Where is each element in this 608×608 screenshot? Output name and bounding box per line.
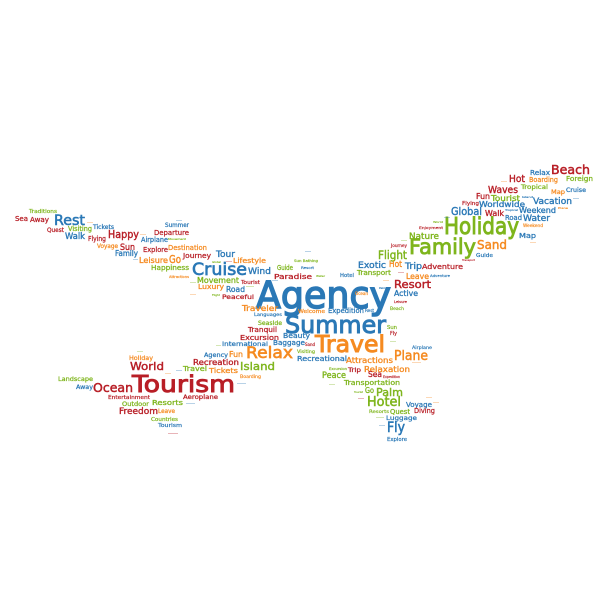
panel: lower right tail wing words — [297, 332, 439, 443]
panel: left wing words: Quest — [47, 228, 65, 234]
panel: fuselage words: Sun Bathing — [294, 259, 318, 263]
panel: left wing words: Airplane — [141, 236, 168, 244]
panel: lower left tail wing words: Leave — [158, 409, 175, 415]
panel: fuselage words: Tranquil — [247, 326, 277, 334]
word: Travel: Travel — [314, 332, 385, 358]
panel: lower left tail wing words: Entertainment — [108, 395, 150, 401]
panel: lower left tail wing words: Recreation — [193, 358, 239, 367]
panel: fuselage words: Movement — [197, 276, 239, 285]
panel: right wing words: Cruise — [566, 187, 586, 194]
panel: left wing words: Voyage — [97, 244, 118, 250]
panel: right wing words: Island — [522, 195, 533, 199]
panel: lower right tail wing words: Expedition — [383, 375, 400, 379]
panel: fuselage words: Paradise — [274, 273, 312, 281]
word: Palm: Palm — [376, 386, 403, 399]
panel: fuselage words: Active — [394, 289, 418, 298]
panel: right wing words: Relax — [530, 169, 550, 177]
panel: right wing words: Guide — [476, 253, 494, 259]
panel: fuselage words: Guide — [277, 264, 293, 272]
panel: fuselage words: Palm — [379, 286, 386, 290]
panel: lower left tail wing words: Travel — [182, 364, 207, 373]
word: Ocean: Ocean — [93, 381, 133, 395]
panel: right wing words: Adventure — [422, 262, 463, 271]
panel: fuselage words: Excursion — [240, 333, 279, 342]
panel: fuselage words: Beauty — [283, 331, 311, 340]
panel: left wing words: Away — [30, 216, 49, 224]
word: Island: Island — [240, 361, 275, 373]
panel: fuselage words: Tourist — [240, 280, 260, 286]
panel: fuselage words: Luxury — [198, 282, 225, 291]
panel: lower left tail wing words: Outdoor — [122, 401, 150, 408]
word: Fly: Fly — [387, 420, 405, 436]
panel: left wing words: Flying — [88, 235, 106, 243]
panel: fuselage words: Water — [316, 274, 326, 278]
panel: left wing words: Walk — [65, 232, 86, 242]
panel: right wing words: Vacation — [533, 197, 572, 207]
panel: fuselage words: Fly — [390, 331, 397, 337]
panel: fuselage words: Resort — [301, 266, 315, 270]
panel: lower right tail wing words: Recreational — [297, 355, 347, 363]
panel: lower left tail wing words: Aeroplane — [183, 394, 218, 401]
panel: right wing words: Road — [505, 214, 522, 222]
panel: right wing words: Leave — [406, 272, 429, 281]
panel: lower right tail wing words: Diving — [414, 407, 435, 415]
panel: lower right tail wing words: Explore — [387, 437, 407, 443]
panel: lower left tail wing words: Holiday — [129, 356, 154, 362]
panel: fuselage words: Welcome — [298, 309, 326, 315]
panel: lower left tail wing words: Tickets — [208, 366, 238, 375]
panel: left wing words: Destination — [168, 244, 207, 252]
panel: lower right tail wing words: Excursion — [329, 367, 347, 371]
panel: right wing words: Exotic — [358, 261, 386, 271]
panel: right wing words: Plane — [558, 206, 568, 210]
panel: right wing words: Adventure — [430, 273, 451, 278]
panel: fuselage words: Road — [226, 285, 245, 294]
panel: fuselage words: Resort — [394, 278, 432, 291]
panel: lower right tail wing words: Relaxation — [364, 365, 410, 374]
panel: lower right tail wing words: Go — [365, 386, 374, 395]
panel: fuselage words: Sand — [305, 342, 315, 347]
panel: right wing words: Transport — [356, 269, 391, 277]
word: Holiday: Holiday — [444, 214, 519, 240]
panel: fuselage words: Tour — [215, 250, 235, 260]
panel: right wing words: Weekend — [519, 206, 556, 215]
panel: right wing words: Foreign — [566, 175, 593, 183]
panel: right wing words: Hot — [509, 174, 525, 185]
panel: right wing words: Waves — [488, 185, 518, 196]
panel: lower right tail wing words: Tourist — [353, 390, 364, 394]
panel: left wing words: Family — [115, 249, 139, 258]
panel: fuselage words: International — [222, 340, 268, 348]
panel: lower right tail wing words: Peace — [322, 371, 346, 381]
panel: left wing words: Explore — [143, 246, 168, 254]
word: Summer: Summer — [285, 311, 386, 339]
panel: fuselage words: Languages — [254, 312, 283, 318]
panel: fuselage words: Lifestyle — [233, 257, 266, 265]
panel: lower right tail wing words: Attractions — [346, 356, 393, 365]
panel: right wing words — [356, 162, 593, 281]
panel: right wing words: Tropical — [504, 208, 518, 212]
panel: left wing words: Sun — [120, 243, 135, 253]
panel: right wing words: Map — [551, 189, 565, 196]
panel: left wing words: Leisure — [139, 255, 168, 265]
word: Family: Family — [409, 235, 476, 259]
panel: right wing words: Water — [523, 213, 551, 223]
panel: fuselage words: Leisure — [394, 300, 407, 304]
panel: lower left tail wing words: Fun — [229, 350, 243, 359]
panel: left wing words: Journey — [182, 252, 211, 260]
panel: fuselage words: Visiting — [297, 349, 316, 354]
word: Hotel: Hotel — [367, 395, 401, 410]
panel: lower left tail wing words: Resorts — [152, 398, 183, 407]
panel: lower left tail wing words: Landscape — [58, 377, 93, 383]
panel: fuselage words: Peaceful — [222, 293, 254, 301]
panel: lower right tail wing words: Airplane — [412, 345, 432, 351]
word: Plane: Plane — [394, 349, 428, 364]
panel: fuselage words: Seaside — [258, 321, 282, 327]
panel: fuselage words: Traveler — [241, 304, 279, 313]
panel: right wing words: Transport — [461, 258, 476, 262]
panel: lower left tail wing words: Freedom — [119, 407, 158, 417]
word: Agency: Agency — [256, 274, 391, 317]
panel: right wing words: Tropical — [520, 184, 548, 191]
panel: fuselage words: Wind — [248, 267, 271, 277]
panel: lower right tail wing words: Resorts — [369, 409, 390, 415]
panel: right wing words: Walk — [485, 209, 504, 218]
panel: right wing words: Enjoyment — [419, 226, 444, 230]
panel: right wing words: Worldwide — [479, 199, 525, 209]
panel: lower left tail wing words: Tourism — [157, 423, 182, 429]
panel: lower right tail wing words: Trip — [347, 366, 361, 374]
panel: left wing words: Tickets — [92, 224, 114, 231]
panel: fuselage words — [190, 250, 432, 354]
word: World: World — [130, 360, 164, 373]
panel: lower left tail wing words: Boarding — [240, 374, 262, 379]
panel: right wing words: Flying — [462, 201, 479, 207]
panel: right wing words: Map — [519, 232, 537, 240]
panel: left wing words: Go — [169, 253, 181, 266]
panel: left wing words: Traditions — [28, 209, 57, 215]
panel: fuselage words: Hotel — [340, 273, 354, 279]
panel: left wing words: Summer — [165, 222, 189, 229]
panel: fuselage words: Rest — [365, 308, 374, 313]
panel: right wing words: Hot — [389, 260, 402, 270]
panel: right wing words: Trip — [404, 262, 422, 272]
panel: lower right tail wing words: Luggage — [386, 414, 417, 422]
panel: right wing words: Global — [451, 206, 482, 218]
panel: lower left tail wing words: Countries — [151, 417, 178, 423]
word: Cruise: Cruise — [192, 260, 247, 279]
word: Beach: Beach — [551, 162, 590, 177]
panel: fuselage words: Expedition — [328, 307, 364, 315]
word: Sand: Sand — [477, 238, 507, 252]
word: Happy: Happy — [108, 229, 139, 241]
panel: left wing words: Movement — [168, 237, 187, 241]
panel: left wing words: Attractions — [169, 275, 189, 279]
panel: left wing words: Visiting — [68, 225, 92, 233]
panel: right wing words: Nature — [409, 232, 439, 242]
panel: left wing words: Departure — [154, 229, 189, 237]
panel: fuselage words: Global — [212, 260, 221, 264]
panel: right wing words: Weekend — [523, 223, 543, 228]
panel: right wing words: World — [433, 220, 443, 224]
panel: lower left tail wing words — [58, 343, 293, 434]
panel: lower right tail wing words: Quest — [390, 408, 410, 416]
panel: lower left tail wing words: Agency — [204, 351, 228, 359]
panel: right wing words: Tourist — [490, 194, 520, 203]
panel: left wing words — [15, 209, 211, 279]
panel: lower left tail wing words: Away — [76, 385, 94, 391]
panel: lower right tail wing words: Voyage — [406, 401, 432, 409]
panel: lower right tail wing words: Transportation — [343, 379, 400, 387]
panel: fuselage words: Baggage — [273, 338, 306, 347]
panel: right wing words: Journey — [390, 243, 408, 248]
word: Tourism: Tourism — [131, 372, 235, 398]
panel: right wing words: Flight — [378, 248, 407, 262]
panel: lower right tail wing words: Sea — [368, 370, 382, 379]
panel: left wing words: Happiness — [151, 264, 189, 272]
panel: left wing words: Sea — [15, 215, 28, 223]
panel: fuselage words: Flight — [212, 293, 221, 297]
panel: fuselage words: Sun — [387, 325, 397, 331]
panel: right wing words: Boarding — [529, 176, 558, 184]
panel: fuselage words: Ocean — [355, 291, 368, 296]
panel: fuselage words: Beach — [390, 306, 405, 311]
panel: right wing words: Fun — [476, 192, 490, 201]
word: Rest: Rest — [54, 213, 86, 229]
word: Relax: Relax — [246, 343, 293, 362]
